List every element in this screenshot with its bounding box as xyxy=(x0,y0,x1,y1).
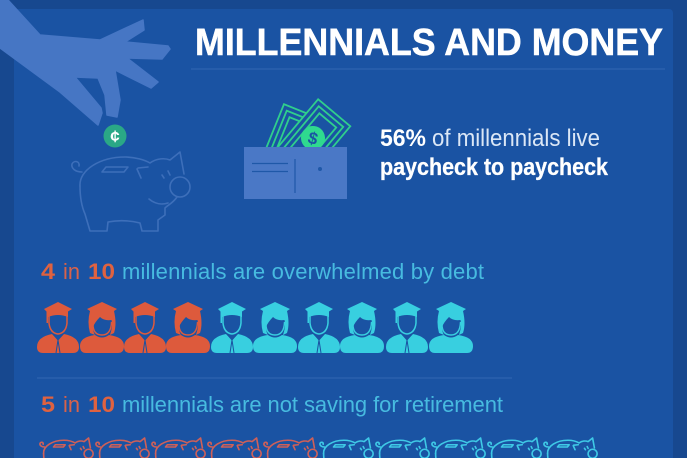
heading: debt: 4 xyxy=(41,259,56,284)
stat: 56 percent: of millennials live xyxy=(432,125,600,152)
title divider xyxy=(191,68,665,70)
stat: 56 percent: 56% xyxy=(380,125,426,152)
heading: retirement: in xyxy=(63,392,80,417)
title: MILLENNIALS AND MONEY xyxy=(195,22,663,64)
stat: 56 percent xyxy=(380,125,609,181)
icon: piggy bank xyxy=(72,152,190,231)
heading: retirement: 5 xyxy=(41,392,55,417)
icon: cent coin: ¢ xyxy=(110,127,120,146)
icon: hand dropping coin xyxy=(0,0,170,125)
back banknote xyxy=(259,104,325,182)
stat: 56 percent: paycheck to paycheck xyxy=(380,154,609,181)
icon: wallet with money xyxy=(244,99,350,199)
icon: cent coin xyxy=(104,124,126,148)
heading: debt: in xyxy=(63,259,80,284)
front banknote: $ xyxy=(306,128,320,149)
heading: debt: millennials are overwhelmed by debt xyxy=(122,259,484,284)
wallet body xyxy=(244,147,347,199)
heading: debt: 10 xyxy=(88,259,115,284)
chart: piggy banks 5 of 10 xyxy=(40,438,597,458)
chart: graduates 4 of 10 xyxy=(37,302,473,353)
heading: retirement: millennials are not saving for retirement xyxy=(122,392,503,417)
section divider xyxy=(37,378,512,379)
wallet details xyxy=(252,159,295,193)
heading: retirement: 10 xyxy=(88,392,115,417)
